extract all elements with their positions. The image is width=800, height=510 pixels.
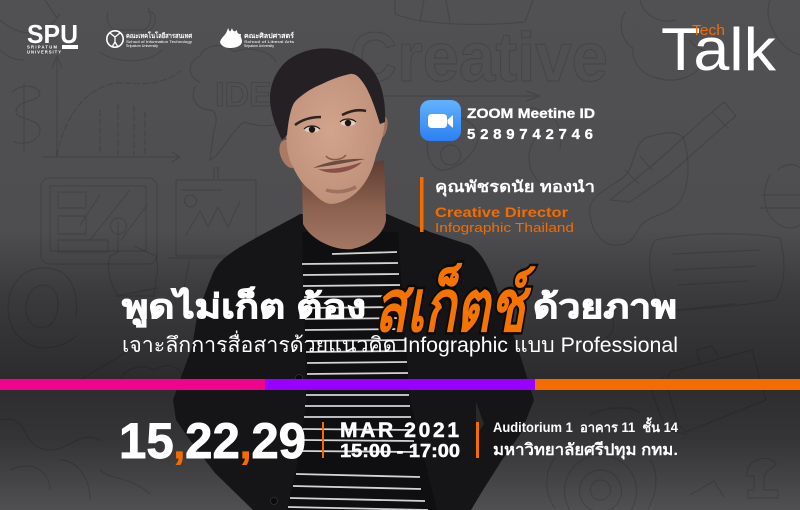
zoom meeting details xyxy=(467,105,596,143)
speaker details: Infographic Thailand xyxy=(435,220,574,235)
neck xyxy=(302,160,386,249)
logo: Tech Talk: Talk xyxy=(661,16,777,83)
ear right xyxy=(379,117,388,139)
venue xyxy=(493,417,678,460)
month and time: MAR 2021 xyxy=(340,419,460,442)
logo: School of Liberal Arts xyxy=(220,28,294,48)
logo: School of Liberal Arts: Sripatum University xyxy=(244,44,274,48)
speaker details: Creative Director xyxy=(435,204,569,220)
month and time xyxy=(340,419,460,461)
zoom meeting details: ZOOM Meetine ID xyxy=(467,105,595,121)
event dates: 15,22,29 xyxy=(119,413,306,469)
logo: School of Information Technology: School of Information Technology xyxy=(126,39,192,44)
background doodles: IDE xyxy=(215,76,272,114)
icon: zoom xyxy=(420,100,461,141)
nose xyxy=(326,155,346,160)
venue: มหาวิทยาลัยศรีปทุม กทม. xyxy=(493,440,678,460)
title: ด้วยภาพ xyxy=(533,288,677,325)
jacket buttons xyxy=(296,374,302,382)
subtitle: เจาะลึกการสื่อสารด้วยแนวคิด Infographic แบบ Professional xyxy=(122,330,678,357)
title xyxy=(122,286,677,328)
hair xyxy=(270,48,385,140)
speaker accent bar xyxy=(420,177,424,232)
eyes xyxy=(304,119,356,133)
colour band xyxy=(0,379,800,390)
shirt stripes xyxy=(288,252,428,510)
logo: School of Information Technology: Sripatum University xyxy=(126,44,158,48)
logo: School of Information Technology xyxy=(107,31,192,48)
jacket xyxy=(173,214,534,510)
speaker details: คุณพัชรดนัย ทองนำ xyxy=(435,178,595,197)
speaker details xyxy=(435,178,595,235)
logo: School of Information Technology: คณะเทคโนโลยีสารสนเทศ xyxy=(126,31,192,40)
face xyxy=(286,72,384,204)
brows xyxy=(295,117,321,125)
logo: SPU: SPU xyxy=(27,19,78,49)
logo: School of Liberal Arts: School of Liberal Arts xyxy=(244,39,294,44)
moustache and mouth xyxy=(313,159,365,168)
venue: Auditorium 1 อาคาร 11 ชั้น 14 xyxy=(493,417,678,435)
title highlight: sketch: สเก็ตช์ xyxy=(372,262,537,347)
divider xyxy=(476,422,479,458)
zoom meeting details: 5289742746 xyxy=(467,126,596,143)
title: พูดไม่เก็ต ต้อง xyxy=(122,286,366,328)
logo: SPU: UNIVERSITY xyxy=(27,50,61,54)
presenter photo xyxy=(173,48,534,510)
background doodles: Creative xyxy=(350,18,608,96)
ear left xyxy=(279,140,293,168)
logo: Tech Talk: Tech xyxy=(692,22,725,39)
logo: SPU: SRIPATUM xyxy=(27,44,58,50)
logo: School of Liberal Arts: คณะศิลปศาสตร์ xyxy=(244,31,294,40)
month and time: 15:00 - 17:00 xyxy=(340,441,460,461)
divider xyxy=(322,422,324,458)
shirt xyxy=(287,232,437,510)
